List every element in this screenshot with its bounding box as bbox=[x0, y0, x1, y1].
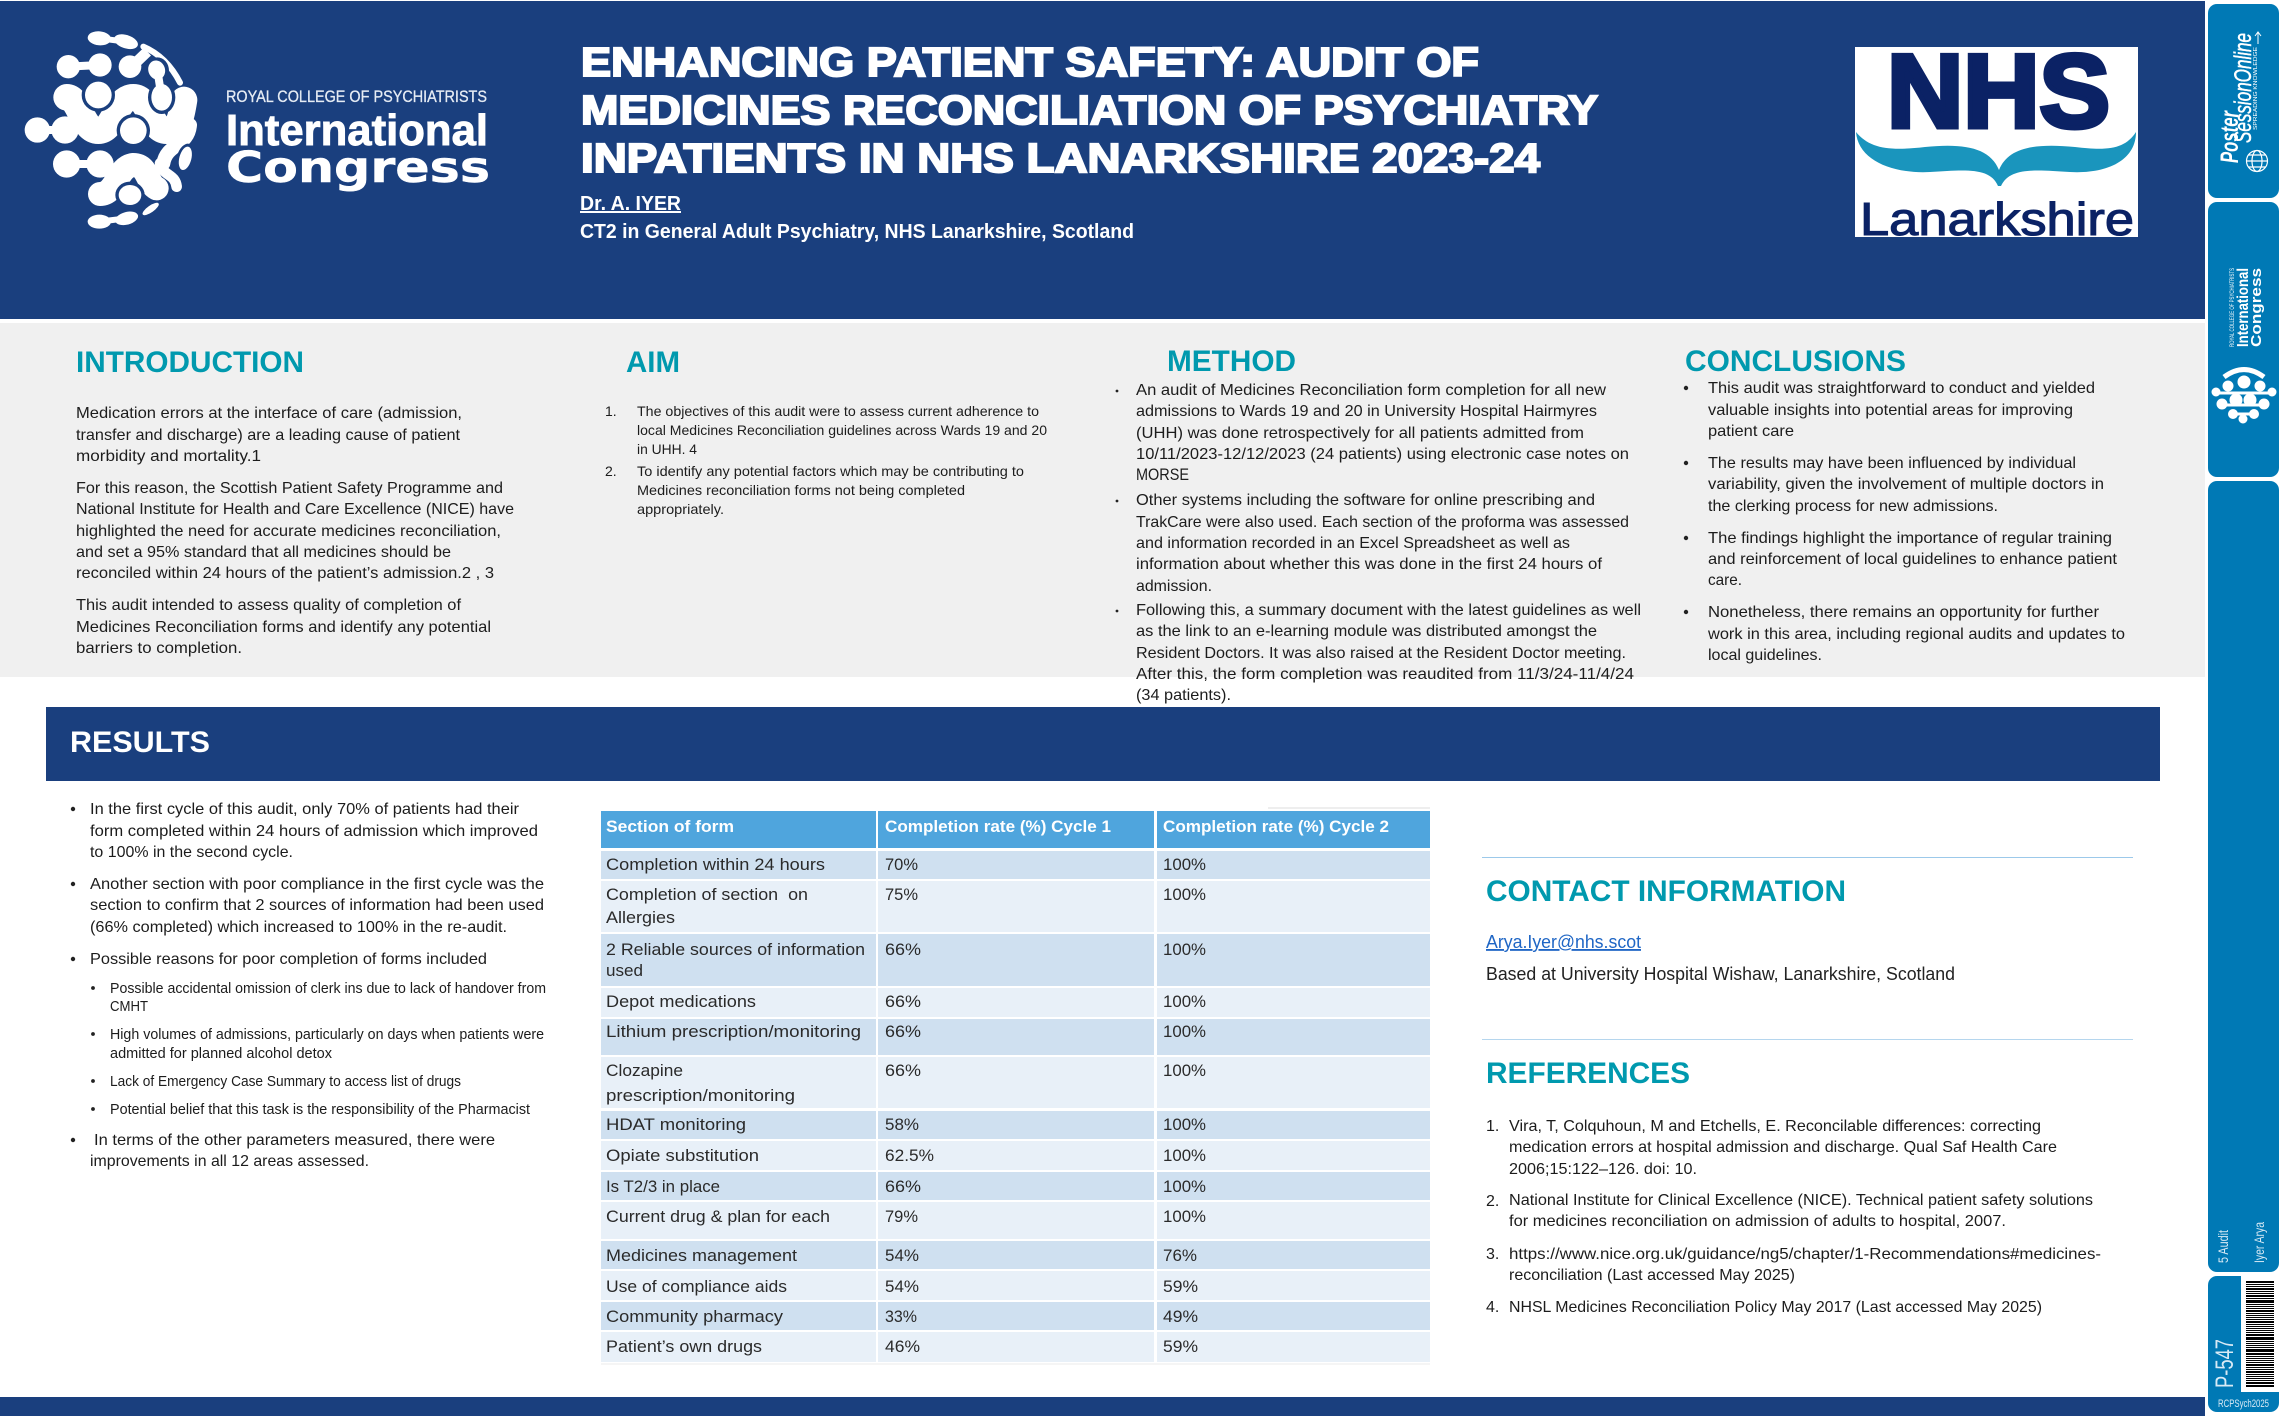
table row labels: Depot medications bbox=[606, 992, 756, 1011]
text block: reference list: 1. bbox=[1486, 1118, 1499, 1135]
text block: aim list: The objectives of this audit were to assess current adherence to bbox=[637, 403, 1039, 419]
table row backgrounds bbox=[601, 851, 1430, 1365]
text block: method bullets: After this, the form completion was reaudited from 11/3/24-11/4/24 bbox=[1136, 666, 1634, 683]
title: MEDICINES RECONCILIATION OF PSYCHIATRY bbox=[581, 87, 1598, 133]
text block: aim list: To identify any potential factors which may be contributing to bbox=[637, 463, 1024, 479]
table cycle 1 values: 33% bbox=[885, 1307, 917, 1326]
panel: contact information bbox=[1482, 857, 2133, 984]
heading: introduction: INTRODUCTION bbox=[76, 346, 304, 379]
text block: reference list: 4. bbox=[1486, 1299, 1499, 1316]
table cycle 1 values: 75% bbox=[885, 885, 918, 904]
table cycle 1 values: 66% bbox=[885, 1061, 921, 1080]
text block: results findings: to 100% in the second cycle. bbox=[90, 844, 293, 861]
table row labels: Lithium prescription/monitoring bbox=[606, 1022, 861, 1041]
text block: introduction: barriers to completion. bbox=[76, 640, 242, 657]
sidebar: international congress tab: Congress bbox=[2248, 268, 2265, 347]
text block: conclusions bullets bbox=[1684, 380, 2125, 664]
text block: reference list: National Institute for Clinical Excellence (NICE). Technical patient safety solutions bbox=[1509, 1192, 2093, 1209]
table cycle 1 values: 54% bbox=[885, 1246, 919, 1265]
table cycle 2 values bbox=[1163, 855, 1206, 1356]
grey overview band bbox=[0, 323, 2205, 677]
table row labels: 2 Reliable sources of information bbox=[606, 940, 865, 959]
text block: conclusions bullets: variability, given the involvement of multiple doctors in bbox=[1708, 476, 2104, 493]
text block: method bullets: (34 patients). bbox=[1136, 687, 1231, 704]
sidebar: author tab: Iyer Arya bbox=[2251, 1222, 2267, 1263]
table row labels: HDAT monitoring bbox=[606, 1115, 746, 1134]
table cycle 2 values: 49% bbox=[1163, 1307, 1198, 1326]
text block: introduction: Medication errors at the interface of care (admission, bbox=[76, 405, 462, 422]
table row labels: Allergies bbox=[606, 908, 675, 927]
table cycle 2 values: 100% bbox=[1163, 1115, 1206, 1134]
NHS Lanarkshire logo bbox=[1855, 34, 2138, 245]
text block: method bullets: Resident Doctors. It was also raised at the Resident Doctor meeting. bbox=[1136, 645, 1626, 662]
heading: contact information: CONTACT INFORMATION bbox=[1486, 875, 1846, 908]
table row labels: used bbox=[606, 961, 643, 980]
table row labels: Is T2/3 in place bbox=[606, 1177, 720, 1196]
text block: method bullets: 10/11/2023-12/12/2023 (24 patients) using electronic case notes on bbox=[1136, 446, 1629, 463]
title: INPATIENTS IN NHS LANARKSHIRE 2023-24 bbox=[581, 135, 1540, 181]
table cycle 1 values: 66% bbox=[885, 1177, 921, 1196]
text block: results findings: improvements in all 12 areas assessed. bbox=[90, 1153, 369, 1170]
text block: aim list: 1. bbox=[605, 403, 617, 419]
table header row: Section of form bbox=[606, 817, 734, 836]
icon: congress globe logo bbox=[25, 30, 198, 229]
text block: conclusions bullets: local guidelines. bbox=[1708, 647, 1822, 664]
text block: reference list: reconciliation (Last accessed May 2025) bbox=[1509, 1267, 1795, 1284]
NHS Lanarkshire logo: NHS bbox=[1887, 34, 2110, 150]
table row labels: Completion of section on bbox=[606, 885, 808, 904]
text block: introduction: morbidity and mortality.1 bbox=[76, 448, 261, 465]
title bbox=[581, 39, 1598, 181]
text block: introduction: highlighted the need for accurate medicines reconciliation, bbox=[76, 523, 501, 540]
text block: results findings: High volumes of admissions, particularly on days when patients were bbox=[110, 1027, 544, 1043]
heading: conclusions: CONCLUSIONS bbox=[1685, 345, 1906, 378]
header banner bbox=[0, 1, 2205, 319]
table row labels: Community pharmacy bbox=[606, 1307, 784, 1326]
text block: results findings: Possible accidental omission of clerk ins due to lack of handover from bbox=[110, 981, 546, 997]
sidebar: author tab: 5 Audit bbox=[2215, 1230, 2231, 1263]
icon: congress globe logo small bbox=[2212, 370, 2276, 423]
text block: reference list bbox=[1486, 1118, 2101, 1316]
text block: reference list: for medicines reconciliation on admission of adults to hospital, 2007. bbox=[1509, 1213, 2006, 1230]
text block: results findings bbox=[71, 801, 546, 1170]
text block: conclusions bullets: This audit was straightforward to conduct and yielded bbox=[1708, 380, 2095, 397]
text block: introduction: reconciled within 24 hours of the patient’s admission.2 , 3 bbox=[76, 565, 494, 582]
table header row: Completion rate (%) Cycle 1 bbox=[885, 817, 1111, 836]
table cycle 1 values: 58% bbox=[885, 1115, 919, 1134]
table cycle 2 values: 59% bbox=[1163, 1277, 1198, 1296]
text block: aim list: 2. bbox=[605, 463, 617, 479]
icon: globe bbox=[2246, 150, 2268, 172]
sidebar: international congress tab: ROYAL COLLEGE OF PSYCHIATRISTS bbox=[2230, 268, 2236, 347]
text block: method bullets: information about whether this was done in the first 24 hours of bbox=[1136, 556, 1603, 573]
sidebar: poster session online tab: SPREADING KNOWLEDGE bbox=[2253, 46, 2259, 130]
text block: reference list: 3. bbox=[1486, 1246, 1499, 1263]
congress wordmark: International bbox=[226, 106, 488, 155]
text block: results findings: In the first cycle of this audit, only 70% of patients had their bbox=[90, 801, 520, 818]
text block: results findings: Another section with poor compliance in the first cycle was the bbox=[90, 876, 544, 893]
text block: results findings: Potential belief that this task is the responsibility of the Pharmacist bbox=[110, 1102, 530, 1118]
text block: reference list: 2006;15:122–126. doi: 10. bbox=[1509, 1161, 1697, 1178]
text block: method bullets: as the link to an e-learning module was distributed amongst the bbox=[1136, 623, 1597, 640]
table cycle 1 values: 66% bbox=[885, 992, 921, 1011]
table cycle 1 values: 54% bbox=[885, 1277, 919, 1296]
table cycle 2 values: 100% bbox=[1163, 992, 1206, 1011]
text block: introduction: National Institute for Health and Care Excellence (NICE) have bbox=[76, 501, 514, 518]
table cycle 1 values: 46% bbox=[885, 1337, 920, 1356]
author: Dr. A. IYER bbox=[580, 193, 682, 215]
sidebar: poster number tab: P-547 bbox=[2211, 1339, 2239, 1388]
text block: conclusions bullets: care. bbox=[1708, 572, 1742, 589]
table header row: Completion rate (%) Cycle 2 bbox=[1163, 817, 1389, 836]
text block: conclusions bullets: The results may have been influenced by individual bbox=[1708, 455, 2076, 472]
text block: conclusions bullets: The findings highlight the importance of regular training bbox=[1708, 530, 2112, 547]
table cycle 2 values: 76% bbox=[1163, 1246, 1197, 1265]
table cycle 2 values: 100% bbox=[1163, 1207, 1206, 1226]
panel: method bbox=[1116, 345, 1641, 704]
text block: method bullets: Other systems including the software for online prescribing and bbox=[1136, 492, 1595, 509]
congress wordmark bbox=[226, 87, 490, 193]
text block: reference list: Vira, T, Colquhoun, M and Etchells, E. Reconcilable differences: correcting bbox=[1509, 1118, 2041, 1135]
sidebar: poster number tab bbox=[2208, 1276, 2279, 1412]
table row labels bbox=[606, 855, 865, 1356]
text block: results findings: Lack of Emergency Case Summary to access list of drugs bbox=[110, 1074, 461, 1090]
table cycle 2 values: 100% bbox=[1163, 1177, 1206, 1196]
heading: method: METHOD bbox=[1167, 345, 1296, 378]
text block: introduction: Medicines Reconciliation forms and identify any potential bbox=[76, 619, 491, 636]
text block: conclusions bullets: patient care bbox=[1708, 423, 1794, 440]
congress wordmark: Congress bbox=[226, 143, 490, 193]
text block: method bullets: Following this, a summary document with the latest guidelines as well bbox=[1136, 602, 1641, 619]
table row labels: prescription/monitoring bbox=[606, 1086, 795, 1105]
text block: results findings: section to confirm that 2 sources of information had been used bbox=[90, 897, 544, 914]
text block: method bullets: An audit of Medicines Reconciliation form completion for all new bbox=[1136, 382, 1606, 399]
table row labels: Current drug & plan for each bbox=[606, 1207, 830, 1226]
heading: references: REFERENCES bbox=[1486, 1057, 1690, 1090]
text block: introduction: and set a 95% standard that all medicines should be bbox=[76, 544, 451, 561]
table cycle 2 values: 100% bbox=[1163, 855, 1206, 874]
table row labels: Use of compliance aids bbox=[606, 1277, 787, 1296]
barcode bbox=[2246, 1281, 2274, 1387]
table: completion rates by form section bbox=[601, 807, 1430, 1365]
panel: conclusions bbox=[1684, 345, 2125, 664]
sidebar: author tab bbox=[2208, 481, 2279, 1272]
text block: conclusions bullets: Nonetheless, there remains an opportunity for further bbox=[1708, 604, 2100, 621]
text block: method bullets: MORSE bbox=[1136, 465, 1189, 484]
text block: introduction bbox=[76, 405, 514, 657]
text block: aim list: in UHH. 4 bbox=[637, 441, 697, 457]
table cycle 2 values: 100% bbox=[1163, 1146, 1206, 1165]
congress wordmark: ROYAL COLLEGE OF PSYCHIATRISTS bbox=[226, 87, 487, 106]
text block: results findings: (66% completed) which increased to 100% in the re-audit. bbox=[90, 919, 507, 936]
table row labels: Patient’s own drugs bbox=[606, 1337, 762, 1356]
text block: results findings: Possible reasons for poor completion of forms included bbox=[90, 951, 487, 968]
table cycle 2 values: 100% bbox=[1163, 1022, 1206, 1041]
NHS Lanarkshire logo: Lanarkshire bbox=[1860, 193, 2134, 245]
text block: conclusions bullets: work in this area, including regional audits and updates to bbox=[1707, 626, 2125, 643]
text block: conclusions bullets: and reinforcement of local guidelines to enhance patient bbox=[1708, 551, 2118, 568]
email link: Arya.Iyer@nhs.scot bbox=[1486, 931, 1641, 952]
text block: results findings: form completed within 24 hours of admission which improved bbox=[90, 823, 538, 840]
text block: aim list bbox=[605, 403, 1047, 517]
table row labels: Completion within 24 hours bbox=[606, 855, 825, 874]
table cycle 1 values: 79% bbox=[885, 1207, 918, 1226]
text block: introduction: This audit intended to assess quality of completion of bbox=[76, 597, 462, 614]
text block: reference list: 2. bbox=[1486, 1193, 1499, 1210]
heading: aim: AIM bbox=[626, 346, 680, 379]
table cycle 2 values: 100% bbox=[1163, 1061, 1206, 1080]
table cycle 1 values: 66% bbox=[885, 1022, 921, 1041]
text block: method bullets bbox=[1116, 382, 1641, 704]
table cycle 1 values: 62.5% bbox=[885, 1146, 934, 1165]
text block: introduction: transfer and discharge) are a leading cause of patient bbox=[76, 427, 461, 444]
table cycle 2 values: 59% bbox=[1163, 1337, 1198, 1356]
text block: method bullets: admissions to Wards 19 and 20 in University Hospital Hairmyres bbox=[1136, 403, 1597, 420]
text block: results findings: admitted for planned alcohol detox bbox=[110, 1046, 333, 1062]
text block: aim list: local Medicines Reconciliation guidelines across Wards 19 and 20 bbox=[637, 422, 1047, 438]
table cycle 2 values: 100% bbox=[1163, 885, 1206, 904]
text block: results findings: CMHT bbox=[110, 999, 148, 1015]
location: Based at University Hospital Wishaw, Lanarkshire, Scotland bbox=[1486, 963, 1955, 984]
sidebar: international congress tab: International bbox=[2235, 268, 2252, 347]
text block: method bullets: (UHH) was done retrospectively for all patients admitted from bbox=[1136, 425, 1584, 442]
sidebar: poster session online tab: Poster bbox=[2216, 110, 2244, 163]
text block: conclusions bullets: valuable insights into potential areas for improving bbox=[1708, 402, 2073, 419]
panel: introduction bbox=[76, 346, 514, 657]
table row labels: Opiate substitution bbox=[606, 1146, 759, 1165]
text block: conclusions bullets: the clerking process for new admissions. bbox=[1708, 498, 1998, 515]
table row labels: Clozapine bbox=[606, 1061, 683, 1080]
table cycle 1 values: 70% bbox=[885, 855, 918, 874]
table row labels: Medicines management bbox=[606, 1246, 797, 1265]
sidebar: poster session online tab bbox=[2208, 4, 2279, 198]
text block: reference list: medication errors at hospital admission and discharge. Qual Saf Health Care bbox=[1509, 1139, 2057, 1156]
title: ENHANCING PATIENT SAFETY: AUDIT OF bbox=[581, 39, 1479, 85]
panel: references bbox=[1482, 1039, 2133, 1316]
text block: method bullets: TrakCare were also used. Each section of the proforma was assessed bbox=[1136, 514, 1629, 531]
affiliation: CT2 in General Adult Psychiatry, NHS Lanarkshire, Scotland bbox=[580, 221, 1134, 243]
table header row bbox=[601, 811, 1430, 848]
text block: reference list: https://www.nice.org.uk/guidance/ng5/chapter/1-Recommendations#medicines- bbox=[1509, 1246, 2101, 1263]
text block: aim list: appropriately. bbox=[637, 501, 724, 517]
table cycle 1 values: 66% bbox=[885, 940, 921, 959]
panel: aim bbox=[605, 346, 1047, 517]
text block: introduction: For this reason, the Scottish Patient Safety Programme and bbox=[76, 480, 503, 497]
text block: results findings: In terms of the other parameters measured, there were bbox=[94, 1132, 495, 1149]
text block: reference list: NHSL Medicines Reconciliation Policy May 2017 (Last accessed May 2025) bbox=[1509, 1299, 2042, 1316]
results heading bar bbox=[46, 707, 2160, 781]
table cycle 1 values bbox=[885, 855, 934, 1356]
text block: aim list: Medicines reconciliation forms not being completed bbox=[637, 482, 965, 498]
table cycle 2 values: 100% bbox=[1163, 940, 1206, 959]
text block: method bullets: admission. bbox=[1136, 578, 1212, 595]
footer bar bbox=[0, 1397, 2205, 1416]
text block: method bullets: and information recorded in an Excel Spreadsheet as well as bbox=[1136, 535, 1570, 552]
sidebar: international congress tab bbox=[2208, 202, 2279, 477]
results heading bar: RESULTS bbox=[70, 726, 210, 759]
